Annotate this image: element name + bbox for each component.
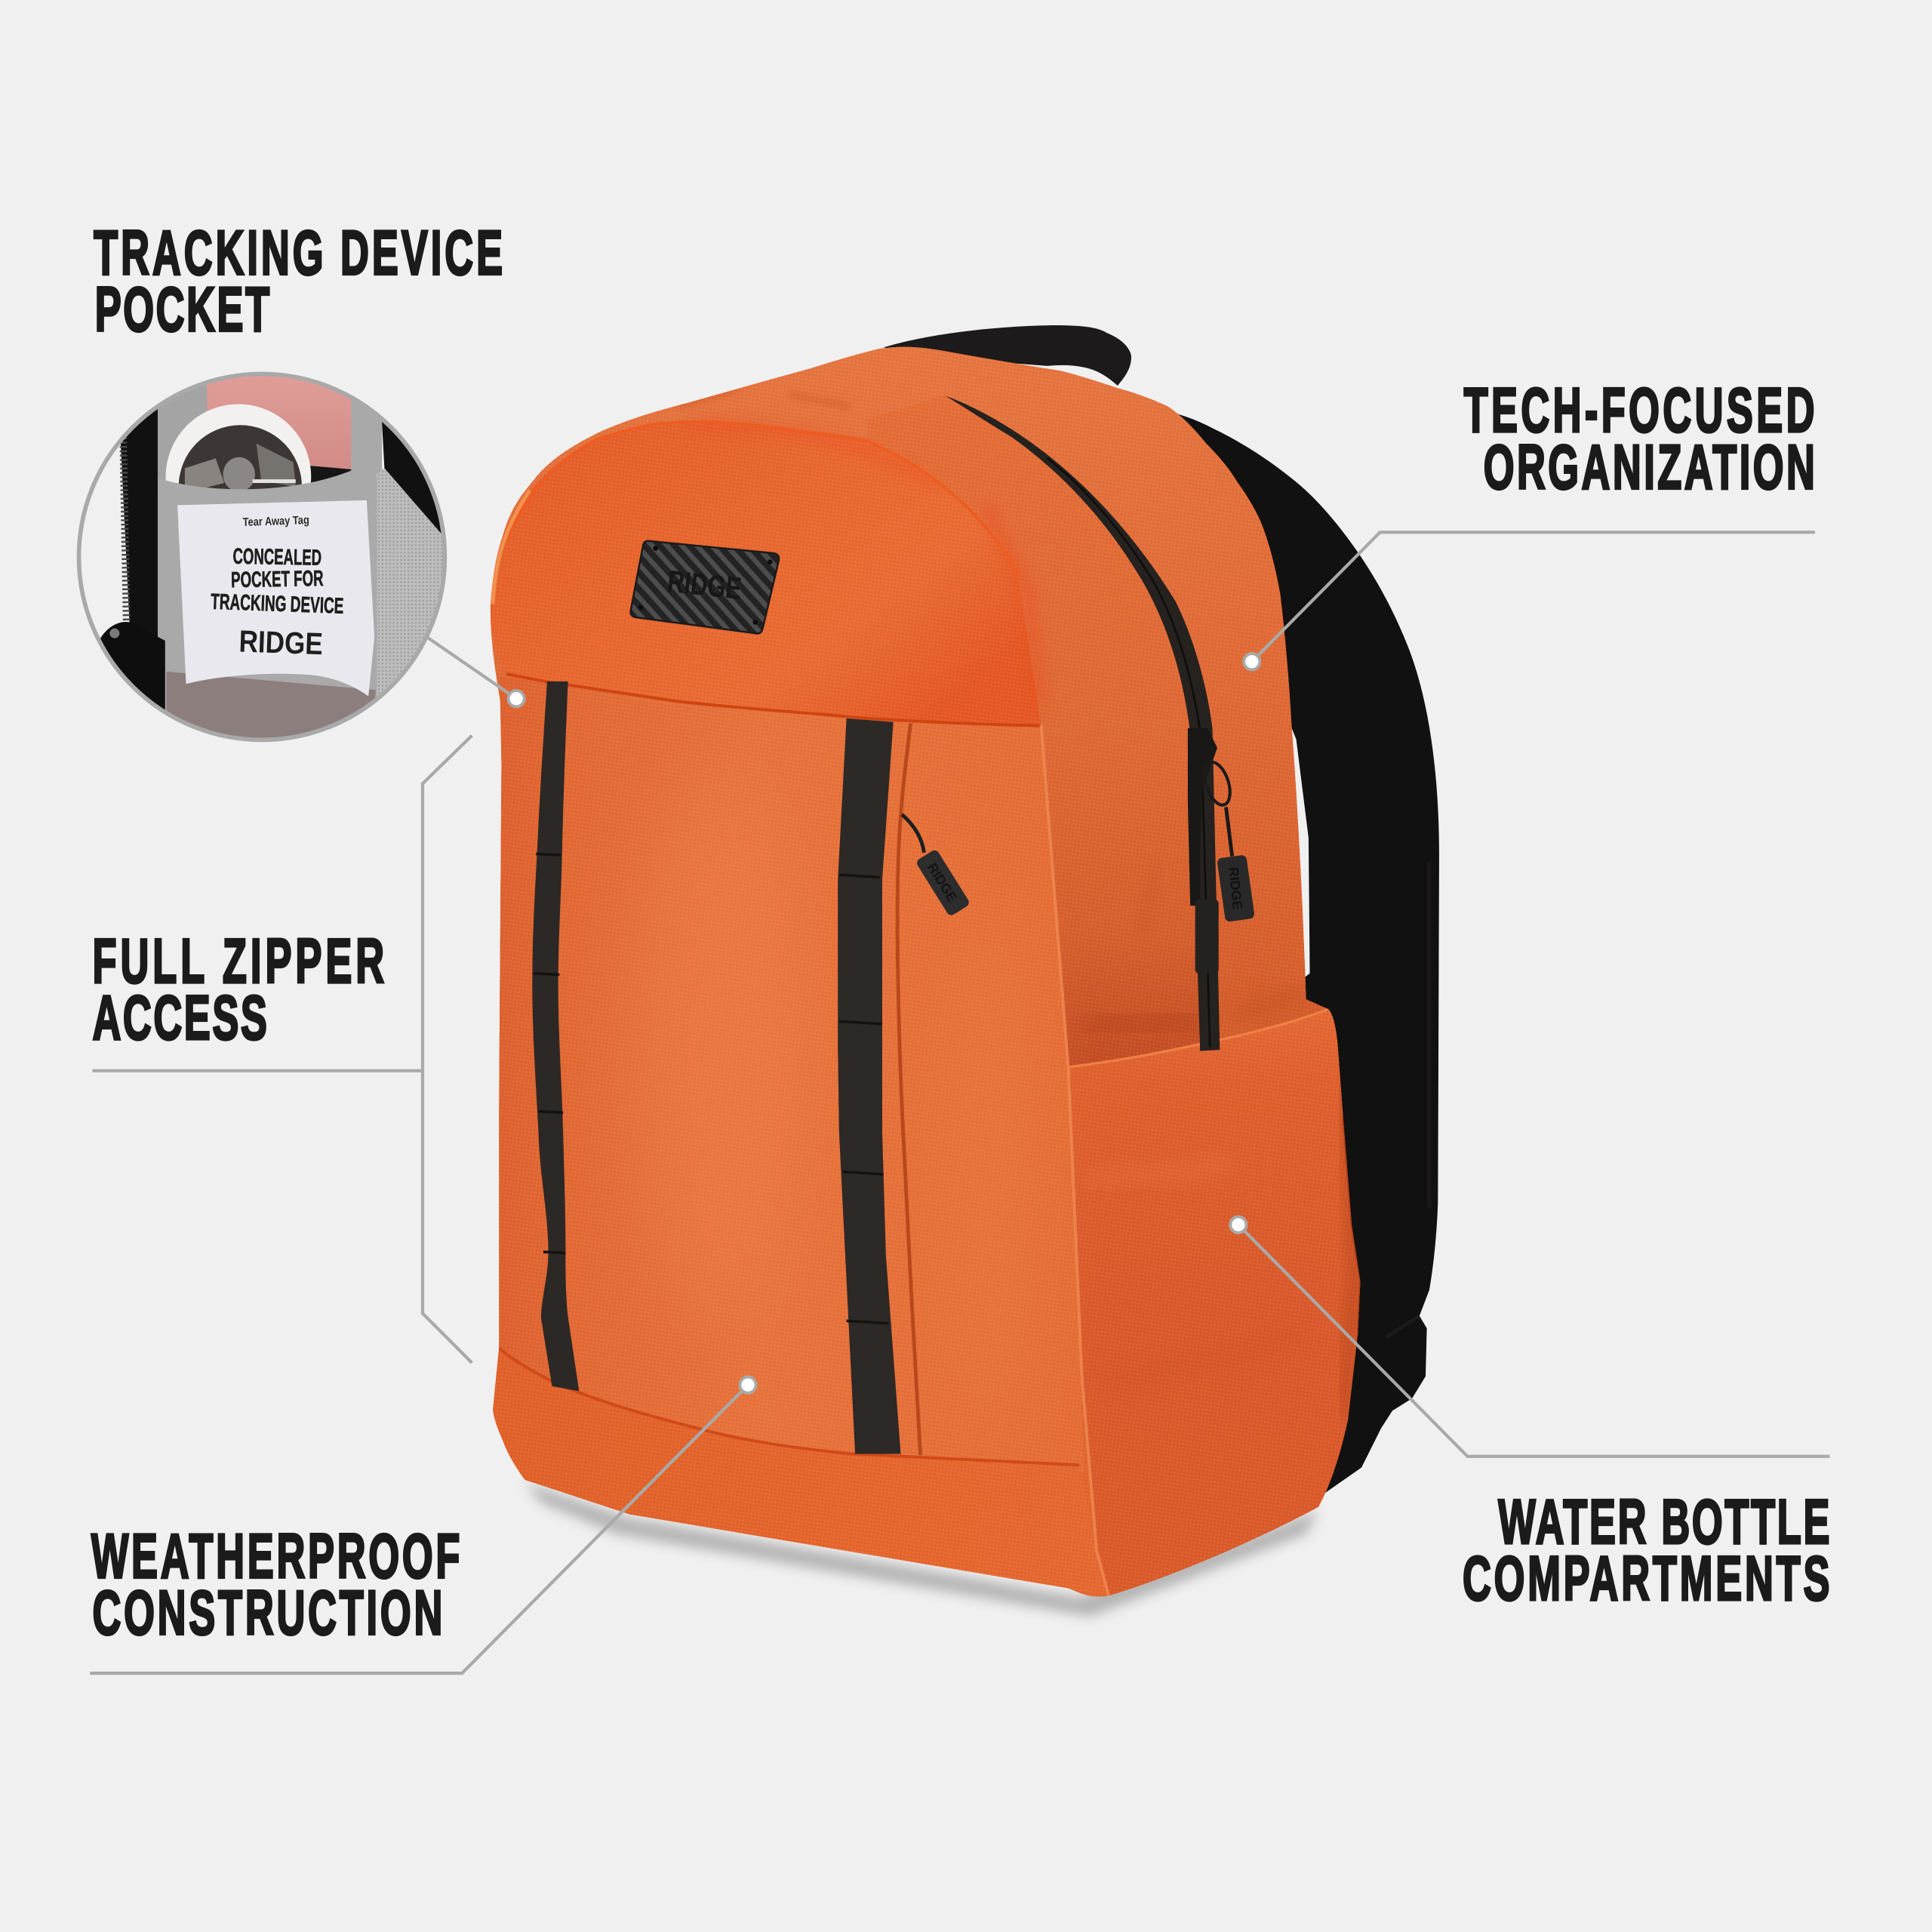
heading: tracking device pocket: POCKET	[95, 274, 269, 344]
heading: weatherproof construction: CONSTRUCTION	[92, 1577, 442, 1648]
soft light and shade	[629, 388, 1355, 1454]
airtag	[166, 405, 311, 549]
left side panel	[1064, 987, 1200, 1066]
tag text: CONCEALED	[232, 544, 321, 571]
grey top lining	[158, 385, 207, 480]
heading: tech-focused organization: ORGANIZATION	[1484, 432, 1815, 502]
main zipper	[945, 395, 1220, 1051]
front lower panel	[499, 676, 1084, 1472]
callout: water bottle leader	[1230, 1217, 1829, 1457]
lower lining	[166, 672, 376, 752]
mesh pocket	[376, 468, 442, 696]
heading: weatherproof construction: WEATHERPROOF	[91, 1521, 460, 1592]
tag text: POCKET FOR	[231, 566, 324, 592]
main zipper pulls	[1188, 728, 1255, 974]
black top right lining	[382, 422, 441, 534]
logo badge	[631, 541, 779, 633]
base fabric	[481, 333, 1380, 1614]
zipper pull label: RIDGE	[1226, 866, 1245, 911]
inset circle: tracking device pocket detail	[74, 364, 456, 758]
strap stitching	[534, 854, 888, 1323]
callout: full zipper bracket	[92, 736, 472, 1363]
callout: tech-focused leader	[1244, 532, 1815, 669]
gusset and right side panel	[481, 333, 1380, 1072]
main body panels	[481, 333, 1380, 1614]
mesh strip	[351, 400, 382, 475]
heading: tracking device pocket	[94, 217, 503, 344]
heading: full zipper access	[92, 926, 384, 1053]
heading: tech-focused organization: TECH-FOCUSED	[1464, 375, 1815, 445]
front pocket zipper seam	[897, 723, 921, 1455]
front upper flap	[491, 422, 1041, 726]
tag text: Tear Away Tag	[242, 514, 309, 529]
tag text	[211, 514, 344, 661]
logo badge: RIDGE	[666, 564, 743, 606]
heading: full zipper access: ACCESS	[92, 983, 267, 1053]
water bottle pocket	[1069, 1009, 1367, 1601]
heading: tracking device pocket: TRACKING DEVICE	[94, 217, 503, 288]
top carry handle	[884, 325, 1131, 386]
tag text: TRACKING DEVICE	[211, 589, 344, 619]
callout: tracking pocket leader	[425, 635, 525, 706]
bottom band	[487, 1348, 1112, 1601]
heading: weatherproof construction	[91, 1521, 460, 1648]
heading: water bottle compartments: COMPARTMENTS	[1463, 1543, 1829, 1614]
callout: weatherproof leader	[90, 1377, 756, 1673]
heading: tech-focused organization	[1464, 375, 1815, 502]
seams	[493, 422, 1360, 1597]
zipper and dark lining	[121, 409, 158, 637]
pink lining	[207, 376, 352, 469]
back padding and shoulder strap	[1157, 409, 1439, 1515]
light gap behind zipper panel	[1281, 721, 1310, 986]
pocket zipper pull	[902, 814, 971, 917]
left webbing strap	[532, 681, 579, 1391]
heading: water bottle compartments	[1463, 1487, 1830, 1614]
right webbing strap	[838, 718, 900, 1454]
heading: water bottle compartments: WATER BOTTLE	[1498, 1487, 1830, 1557]
heading: full zipper access: FULL ZIPPER	[92, 926, 384, 996]
zipper puller	[96, 622, 165, 740]
tag text: RIDGE	[238, 623, 323, 661]
paper tag	[177, 500, 374, 696]
pocket fabric	[158, 471, 377, 740]
backpack	[481, 325, 1439, 1617]
ground shadow	[525, 1482, 1318, 1617]
pocket zipper pull: RIDGE	[924, 860, 960, 905]
fabric weave	[481, 333, 1380, 1614]
shadow behind airtag	[310, 466, 352, 483]
